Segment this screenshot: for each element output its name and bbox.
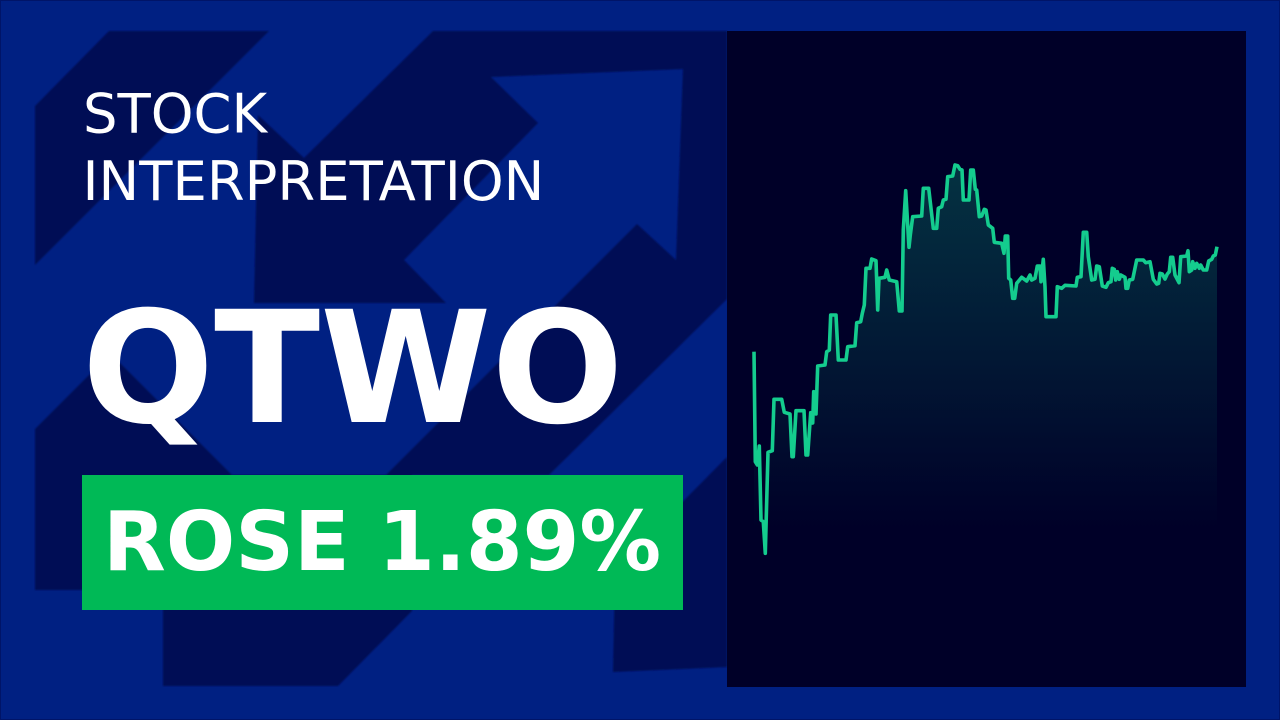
heading: stock interpretation: INTERPRETATION [82,150,544,213]
heading: stock interpretation [82,82,544,213]
price line [754,165,1217,553]
badge: rose percentage: ROSE 1.89% [103,495,661,590]
chart panel [727,31,1246,687]
background arrows [35,31,727,686]
area under price line [754,165,1217,560]
heading: stock interpretation: STOCK [83,82,269,146]
ticker: QTWO: QTWO [82,278,624,459]
badge: rose percentage [82,475,683,610]
